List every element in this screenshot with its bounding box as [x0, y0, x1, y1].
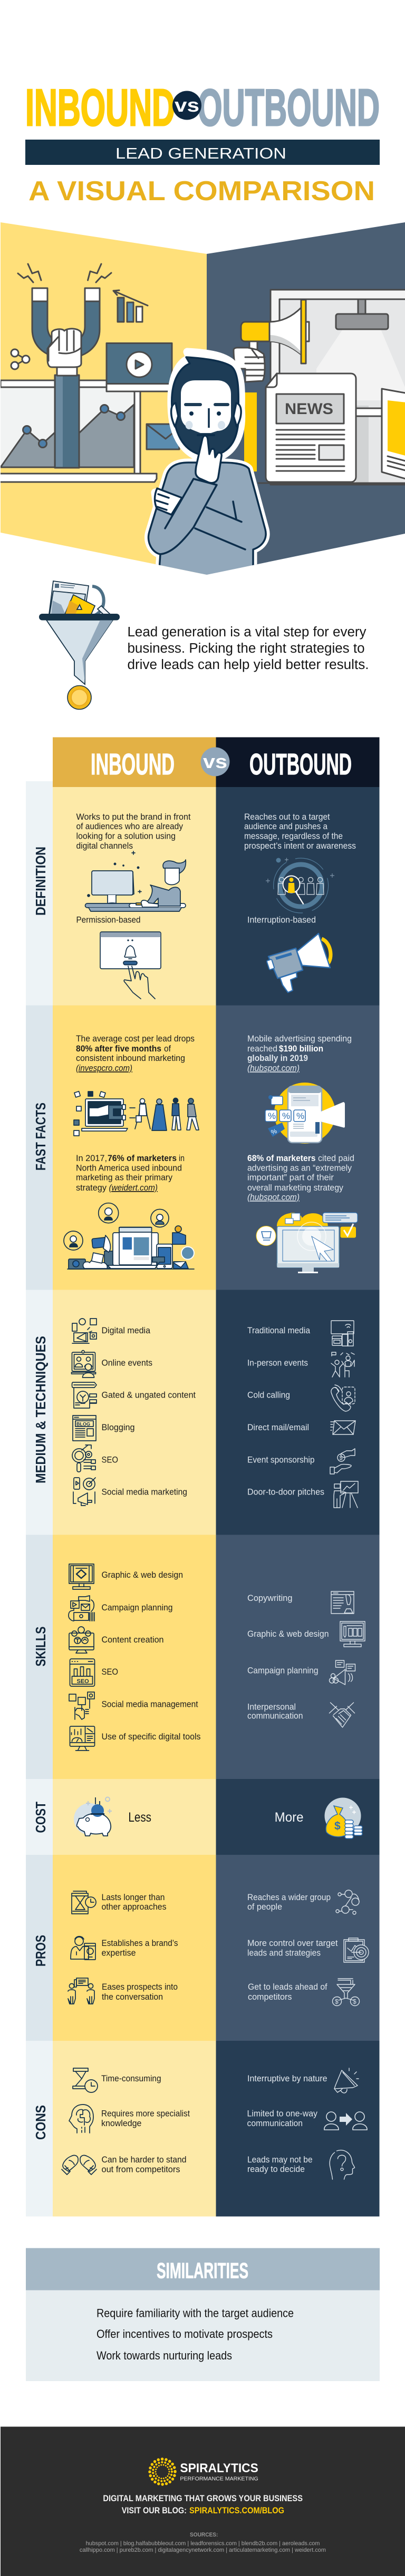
icon: person at computer [85, 851, 186, 911]
definition: inbound text [76, 812, 191, 925]
outbound scene: floor line [258, 483, 405, 484]
definition: outbound text: audience and pushes a [244, 821, 327, 831]
pros: outbound list: competitors [248, 1992, 292, 2002]
medium: outbound list: Door-to-door pitches [247, 1487, 324, 1497]
pros: inbound list: Establishes a brand’s [101, 1938, 178, 1948]
medium: outbound list: Direct mail/email [247, 1422, 309, 1432]
fast facts: outbound fact one: reached [247, 1044, 277, 1054]
inbound scene: sparks [18, 264, 111, 282]
icon: network of people [336, 1890, 359, 1914]
icon: online events [72, 1351, 96, 1378]
pros: label: PROS [33, 1935, 49, 1967]
fast facts: inbound fact two: 76% of marketers [108, 1153, 177, 1163]
subtitle banner [25, 140, 380, 165]
icon: blogging: BLOG [76, 1421, 90, 1427]
icon: campaign planning [69, 1596, 94, 1621]
fast facts: outbound fact one: (hubspot.com) [247, 1063, 300, 1073]
skills: outbound list: Graphic & web design [247, 1629, 329, 1639]
pros: inbound list [101, 1892, 178, 2002]
funnel illustration [39, 581, 120, 709]
skills: inbound list: Campaign planning [101, 1602, 173, 1613]
cost: backgrounds [26, 1779, 380, 1855]
definition: outbound text: Reaches out to a target [244, 812, 330, 822]
skills: inbound list: Content creation [101, 1635, 163, 1645]
logo sunburst [150, 2459, 175, 2484]
sources [80, 2532, 326, 2553]
icon: social media management [69, 1692, 94, 1719]
fast facts: inbound fact one: of [164, 1044, 171, 1054]
icon: one-way communication [324, 2112, 367, 2130]
fast facts: outbound fact two: 68% of marketers [247, 1153, 315, 1163]
fast facts: inbound fact two: North America used inbound [76, 1163, 182, 1173]
icon: social devices [64, 1203, 194, 1269]
icon: handshake [329, 1703, 354, 1727]
cons: backgrounds [26, 2041, 380, 2217]
icon: direct mail [331, 1421, 355, 1434]
footer [1, 2426, 405, 2576]
definition: outbound text [244, 812, 356, 925]
intro text [128, 625, 369, 672]
icon: graphic design [340, 1621, 365, 1647]
skills: outbound list: Campaign planning [247, 1666, 319, 1675]
fast facts: inbound fact one [76, 1034, 195, 1073]
similarities: body: Offer incentives to motivate prospects [97, 2327, 273, 2341]
icon: megaphone [266, 933, 331, 992]
icon: social media marketing [73, 1478, 95, 1506]
skills: outbound list: Copywriting [247, 1593, 292, 1603]
medium: inbound list: Blogging [101, 1422, 135, 1432]
pros: inbound list: Lasts longer than [101, 1892, 165, 1902]
title: vs [175, 94, 199, 116]
definition: outbound text: prospect’s intent or awareness [244, 841, 356, 851]
fast facts: inbound fact two [76, 1153, 185, 1193]
icon: hourglass and clock [73, 2068, 98, 2092]
icon: cold calling [331, 1385, 355, 1411]
fast facts: outbound fact two [247, 1153, 354, 1202]
icon: brain head [69, 2105, 93, 2133]
definition: outbound text: message, regardless of the [244, 831, 343, 841]
sources: SOURCES: [190, 2532, 218, 2538]
icon: graphic design monitor [69, 1564, 94, 1589]
icon: lasting hourglass [72, 1891, 96, 1914]
icon: mobile advertising: % [270, 1127, 278, 1136]
icon: gated content [72, 1382, 97, 1408]
icon: blogging [73, 1415, 96, 1441]
tagline: SPIRALYTICS.COM/BLOG [189, 2506, 284, 2515]
icon: door-to-door pitch [334, 1481, 358, 1508]
definition: inbound text: Works to put the brand in front [76, 812, 191, 822]
inbound scene: magnet [32, 288, 100, 358]
icon: question head [330, 2150, 354, 2179]
skills: outbound list: Interpersonal [247, 1702, 296, 1712]
icon: event sponsorship [330, 1449, 355, 1474]
definition: backgrounds [26, 781, 380, 1005]
outbound scene: billboard [271, 290, 405, 485]
outbound scene: megaphone and fist [234, 300, 309, 382]
outbound scene: second paper [382, 389, 405, 480]
definition: inbound text: digital channels [76, 841, 133, 851]
similarities panel [26, 2248, 380, 2381]
fast facts: inbound fact one: (invespcro.com) [76, 1063, 132, 1073]
icon: content creation [69, 1627, 94, 1653]
definition: inbound text: looking for a solution using [76, 831, 176, 841]
cons: inbound list: knowledge [101, 2118, 141, 2128]
skills: outbound list: communication [247, 1711, 303, 1721]
fast facts: inbound fact one: The average cost per lead drops [76, 1034, 195, 1044]
outbound scene: newspaper [266, 373, 356, 482]
cost: inbound value: Less [128, 1810, 151, 1825]
title [25, 78, 380, 136]
icon: mobile advertising: % [296, 1111, 304, 1121]
icon: seo [72, 1445, 95, 1472]
inbound scene: share icon [11, 349, 30, 369]
row: skills [26, 1535, 380, 1779]
inbound scene: window [0, 380, 157, 482]
medium: inbound list: Social media marketing [101, 1487, 187, 1497]
icon: piggy bank [74, 1797, 112, 1836]
row: cost [26, 1779, 380, 1855]
medium: inbound list [101, 1325, 196, 1497]
cons: outbound list: Limited to one-way [247, 2108, 317, 2119]
fast facts: inbound fact two: strategy [76, 1183, 107, 1193]
fast facts: inbound fact one: 80% after five months [76, 1044, 161, 1054]
pros: outbound list: More control over target [247, 1938, 338, 1948]
fast facts: inbound fact one: consistent inbound marketing [76, 1053, 185, 1063]
man: torso and arms [148, 463, 266, 577]
pros: outbound list: Get to leads ahead of [248, 1982, 327, 1992]
cons: outbound list [247, 2073, 327, 2174]
row: fast facts [26, 1005, 380, 1290]
icon: loud megaphone [334, 2068, 359, 2093]
tagline: VISIT OUR BLOG: [122, 2506, 187, 2515]
inbound scene: envelope [147, 424, 179, 449]
icon: target strategy [344, 1938, 369, 1962]
skills: inbound list: SEO [101, 1667, 118, 1677]
skills: inbound list [101, 1570, 200, 1742]
hero illustration [0, 221, 405, 579]
cons: inbound list: Can be harder to stand [101, 2155, 187, 2165]
fast facts: inbound fact two: marketing as their primary [76, 1173, 172, 1182]
fast facts: outbound fact one: globally in 2019 [247, 1053, 308, 1063]
icon: in-person events [331, 1352, 354, 1377]
inbound scene: video board [107, 343, 172, 391]
cons: outbound list: ready to decide [247, 2164, 305, 2174]
fast facts: outbound fact one: $190 billion [279, 1044, 323, 1054]
brand name: PERFORMANCE MARKETING [180, 2475, 258, 2482]
cost: label: COST [33, 1802, 49, 1833]
icon: money bag: $ [334, 1820, 341, 1832]
cons: inbound list [101, 2073, 190, 2175]
skills: label: SKILLS [33, 1627, 49, 1667]
subtitle banner: LEAD GENERATION [115, 145, 286, 162]
icon: digital tools dashboard [70, 1726, 95, 1751]
funnel: content entering [49, 581, 111, 616]
icon: traditional media [331, 1321, 354, 1346]
medium: outbound list: Cold calling [247, 1390, 290, 1400]
intro text: drive leads can help yield better results. [128, 657, 369, 672]
man: head and beard [171, 357, 241, 456]
skills: inbound list: Graphic & web design [101, 1570, 183, 1580]
funnel: cone [46, 620, 113, 684]
pros: backgrounds [26, 1855, 380, 2041]
fast facts: outbound fact two: important” part of their [247, 1173, 334, 1182]
icon: expert with certificate [71, 1936, 95, 1960]
heading: a visual comparison: A VISUAL COMPARISON [28, 175, 375, 206]
pros: outbound list [247, 1892, 338, 2002]
definition: outbound text: Interruption-based [247, 915, 316, 925]
similarities: header: SIMILARITIES [157, 2258, 248, 2283]
fast facts: inbound fact two: in [179, 1153, 185, 1163]
icon: click-through monitor [256, 1213, 358, 1273]
fast facts: outbound fact two: cited paid [318, 1153, 354, 1163]
pros: outbound list: Reaches a wider group [247, 1892, 331, 1902]
intro text: Lead generation is a vital step for every [128, 625, 367, 640]
column header bar: INBOUND [91, 748, 175, 781]
pros: inbound list: Eases prospects into [102, 1982, 178, 1992]
outbound scene: yellow column [244, 392, 257, 471]
icon: seo dashboard: SEO [77, 1678, 89, 1685]
pros: inbound list: expertise [101, 1948, 136, 1958]
cons: outbound list: Leads may not be [247, 2155, 313, 2165]
sources: hubspot.com | blog.halfabubbleout.com | leadforensics.com | blendb2b.com | aeroleads.com [86, 2540, 320, 2546]
column header bar: vs [203, 751, 227, 772]
fast facts: outbound fact two: overall marketing strategy [247, 1183, 343, 1193]
funnel: rim [39, 614, 120, 621]
definition: inbound text: Permission-based [76, 915, 140, 925]
cons: inbound list: out from competitors [101, 2165, 180, 2175]
icon: boxing gloves [62, 2155, 97, 2175]
cons: inbound list: Time-consuming [101, 2073, 161, 2083]
fast facts: outbound fact one [247, 1034, 352, 1073]
medium: outbound list: In-person events [247, 1358, 308, 1368]
row: medium and techniques [26, 1290, 380, 1535]
similarities: body: Work towards nurturing leads [97, 2349, 232, 2362]
icon: seo dashboard [70, 1659, 95, 1686]
brand name: SPIRALYTICS [180, 2461, 258, 2475]
icon: event sponsorship: $ [340, 1455, 343, 1461]
title: INBOUND [25, 78, 175, 136]
definition: label: DEFINITION [33, 847, 49, 916]
similarities: header [26, 2248, 380, 2290]
fast facts: backgrounds [26, 1005, 380, 1290]
thinking man [148, 352, 266, 577]
definition: inbound text: of audiences who are already [76, 821, 183, 831]
similarities: body: Require familiarity with the target audience [97, 2306, 294, 2320]
cons: label: CONS [33, 2105, 49, 2140]
similarities: body [26, 2290, 380, 2381]
icon: speaking megaphone [329, 1660, 355, 1685]
brand name [180, 2461, 258, 2482]
icon: magnet laptop and shoppers [74, 1092, 199, 1136]
fast facts: inbound fact two: In 2017, [76, 1153, 107, 1163]
man: hand on chin [196, 436, 221, 483]
icon: funnel to dollars [332, 1979, 360, 2006]
row: definition [26, 781, 380, 1005]
medium: label: MEDIUM & TECHNIQUES [33, 1336, 49, 1483]
cons: inbound list: Requires more specialist [101, 2108, 190, 2119]
pros: inbound list: other approaches [101, 1902, 167, 1912]
funnel: coin [68, 686, 91, 709]
outbound scene: newspaper: NEWS [285, 400, 333, 418]
icon: two people talking [68, 1978, 94, 2004]
medium: inbound list: Online events [101, 1358, 152, 1368]
skills: backgrounds [26, 1535, 380, 1779]
column header bar [53, 738, 380, 787]
medium: inbound list: Gated & ungated content [101, 1390, 196, 1400]
skills: outbound list [247, 1593, 329, 1721]
cons: outbound list: Interruptive by nature [247, 2073, 327, 2083]
icon: notification bell [100, 932, 161, 999]
tagline [103, 2494, 303, 2515]
fast facts: outbound fact one: Mobile advertising spending [247, 1034, 352, 1044]
skills: inbound list: Social media management [101, 1699, 198, 1709]
icon: copywriting [331, 1591, 354, 1614]
icon: mobile advertising [265, 1083, 345, 1144]
medium: inbound list: SEO [101, 1455, 118, 1464]
skills: inbound list: Use of specific digital tools [101, 1732, 200, 1742]
icon: money bag [325, 1797, 362, 1838]
medium: outbound list: Event sponsorship [247, 1455, 314, 1464]
fast facts: label: FAST FACTS [33, 1103, 49, 1171]
pros: outbound list: of people [247, 1902, 282, 1912]
row: pros [26, 1855, 380, 2041]
medium: inbound list: Digital media [101, 1325, 151, 1335]
medium: backgrounds [26, 1290, 380, 1535]
icon: digital media [72, 1319, 97, 1343]
fast facts: outbound fact two: advertising as an “extremely [247, 1163, 352, 1173]
icon: funnel to dollars: $ [335, 1998, 339, 2005]
fast facts: inbound fact two: (weidert.com) [109, 1183, 158, 1193]
cons: outbound list: communication [247, 2118, 303, 2128]
inbound scene: raised arm and hand [47, 329, 81, 468]
man: gripping hand [155, 488, 182, 515]
icon: funnel to dollars: $ [353, 1998, 356, 2005]
man: white halo [148, 352, 266, 577]
icon: target person in magnifier [266, 858, 334, 913]
medium: outbound list [247, 1325, 324, 1497]
intro text: business. Picking the right strategies to [128, 641, 365, 656]
cost: outbound value: More [275, 1810, 304, 1825]
tagline: DIGITAL MARKETING THAT GROWS YOUR BUSINESS [103, 2494, 303, 2503]
pros: inbound list: the conversation [102, 1992, 163, 2002]
inbound scene: falling bar chart [113, 290, 148, 322]
icon: mobile advertising: % [268, 1111, 276, 1121]
row: cons [26, 2041, 380, 2217]
fast facts: outbound fact two: (hubspot.com) [247, 1192, 300, 1202]
pros: outbound list: leads and strategies [247, 1948, 321, 1958]
icon: mobile advertising: % [282, 1111, 290, 1121]
medium: outbound list: Traditional media [247, 1325, 310, 1335]
sources: callhippo.com | pureb2b.com | digitalagencynetwork.com | articulatemarketing.com | weidert.com [80, 2547, 326, 2553]
